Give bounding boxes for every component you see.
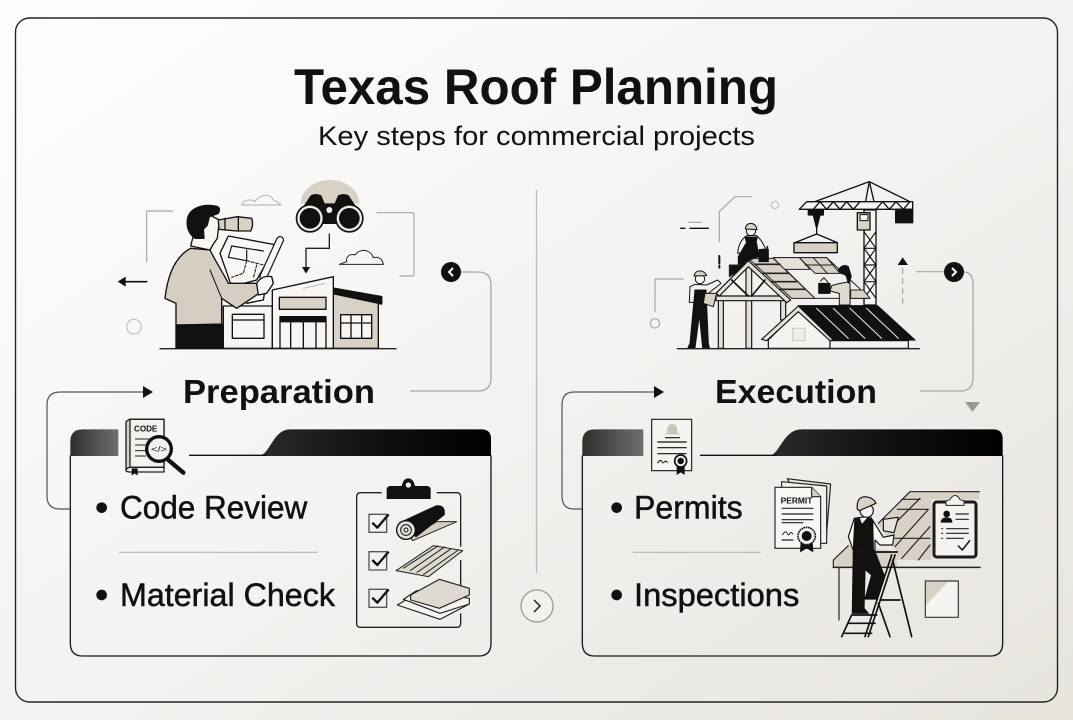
illustration: preparation scene (118, 180, 414, 349)
connector: into execution panel (562, 386, 664, 509)
icon: code book with magnifier (126, 419, 183, 476)
center divider (536, 190, 538, 573)
inspection square (925, 581, 958, 617)
list item: Inspections: Inspections (634, 577, 799, 613)
icon: left arrow (118, 277, 147, 287)
worker: woman on roof (819, 266, 851, 305)
heading: Execution: Execution (715, 373, 877, 410)
worker: foreman with clipboard (688, 256, 721, 348)
icon: back button (441, 262, 461, 282)
arrow: down to building (302, 234, 329, 274)
worker: roofer on ridge (738, 223, 768, 264)
finished house with dark roof (762, 306, 915, 348)
building (223, 277, 382, 348)
illustration: inspector on ladder (833, 492, 980, 637)
decorative brackets and markers (650, 197, 945, 328)
connector: top right of preparation (410, 272, 491, 391)
decorative brackets and markers (127, 195, 414, 334)
icon: materials checklist clipboard (357, 478, 469, 627)
connector: into preparation panel (47, 386, 153, 509)
panel: preparation (70, 419, 491, 656)
subtitle: Key steps for commercial projects (318, 121, 755, 151)
title: Texas Roof Planning (294, 59, 778, 115)
crane (794, 182, 913, 305)
panel body (582, 455, 1003, 656)
inspector (848, 497, 898, 613)
roof surface (833, 492, 980, 620)
icon: permit document (775, 479, 831, 552)
inspection clipboard (934, 495, 976, 557)
connector: top right of execution (920, 272, 973, 391)
list item: Code Review: Code Review (120, 489, 308, 525)
timber truss (716, 261, 791, 348)
icon: binoculars (296, 180, 364, 233)
illustration: execution scene (650, 182, 945, 349)
icon: up triangle (898, 257, 908, 265)
icon: code book with magnifier: CODE (134, 425, 158, 434)
dash marks (681, 226, 708, 230)
icon: gray down triangle (965, 402, 980, 412)
next arrow button (521, 590, 553, 622)
ground line (160, 347, 396, 351)
person with binoculars and blueprint (165, 205, 280, 348)
icon: cloud (339, 250, 383, 264)
panel header tabs (582, 429, 1003, 456)
panel: execution (582, 419, 1003, 656)
heading: Preparation: Preparation (183, 373, 375, 410)
ground line (677, 347, 919, 351)
panel body (70, 455, 491, 656)
list item: Permits: Permits (634, 489, 743, 525)
ladder (842, 552, 912, 637)
panel header tabs (70, 429, 491, 456)
icon: code book with magnifier: </> (151, 444, 167, 454)
icon: forward button (944, 262, 964, 282)
roof under construction (729, 257, 870, 298)
icon: certificate (652, 419, 692, 475)
list item: Material Check: Material Check (120, 577, 336, 613)
icon: permit document: PERMIT (781, 496, 812, 505)
